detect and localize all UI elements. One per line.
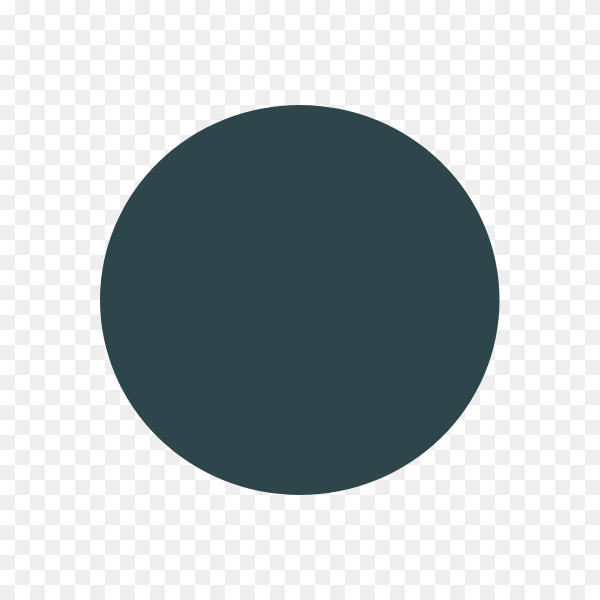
icon: dark teal circle (100, 105, 500, 495)
